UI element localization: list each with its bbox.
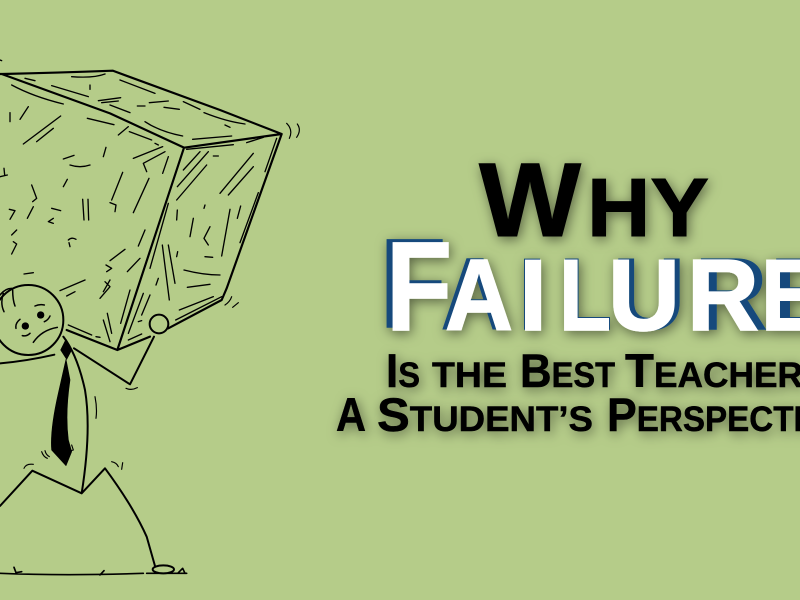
title: Why: HY — [587, 161, 709, 254]
illustration: man carrying a huge block — [0, 60, 299, 575]
subtitle line 2: A — [336, 388, 366, 441]
white layer — [386, 216, 800, 357]
blue offset layer: U — [613, 239, 685, 351]
white layer: A — [445, 240, 513, 352]
subtitle line 1: IS — [386, 344, 420, 397]
subtitle line 2: STUDENT’S — [377, 388, 593, 441]
blue offset layer: L — [560, 239, 612, 351]
title: Failure — [380, 213, 800, 357]
blue offset layer: I — [518, 239, 546, 351]
white layer: U — [608, 240, 680, 352]
foot and ground — [0, 565, 187, 575]
white layer: I — [519, 240, 547, 352]
blue offset layer — [380, 213, 800, 354]
body and limbs — [0, 337, 155, 566]
blue offset layer: F — [380, 213, 446, 354]
white layer: F — [386, 216, 452, 357]
tie — [51, 339, 72, 466]
blue offset layer: R — [695, 239, 767, 351]
white layer: R — [687, 240, 759, 352]
man — [0, 285, 187, 575]
subtitle line 1: BEST — [520, 344, 615, 397]
white layer: L — [559, 240, 611, 352]
block — [0, 60, 299, 350]
head — [0, 285, 63, 355]
subtitle line 2 — [336, 388, 800, 441]
subtitle line 1: TEACHER — [625, 344, 800, 397]
blue offset layer: A — [441, 239, 509, 351]
title: Why — [479, 142, 709, 259]
subtitle line 1: THE — [432, 356, 507, 395]
title: Why: W — [479, 142, 581, 259]
subtitle line 1 — [386, 344, 800, 397]
